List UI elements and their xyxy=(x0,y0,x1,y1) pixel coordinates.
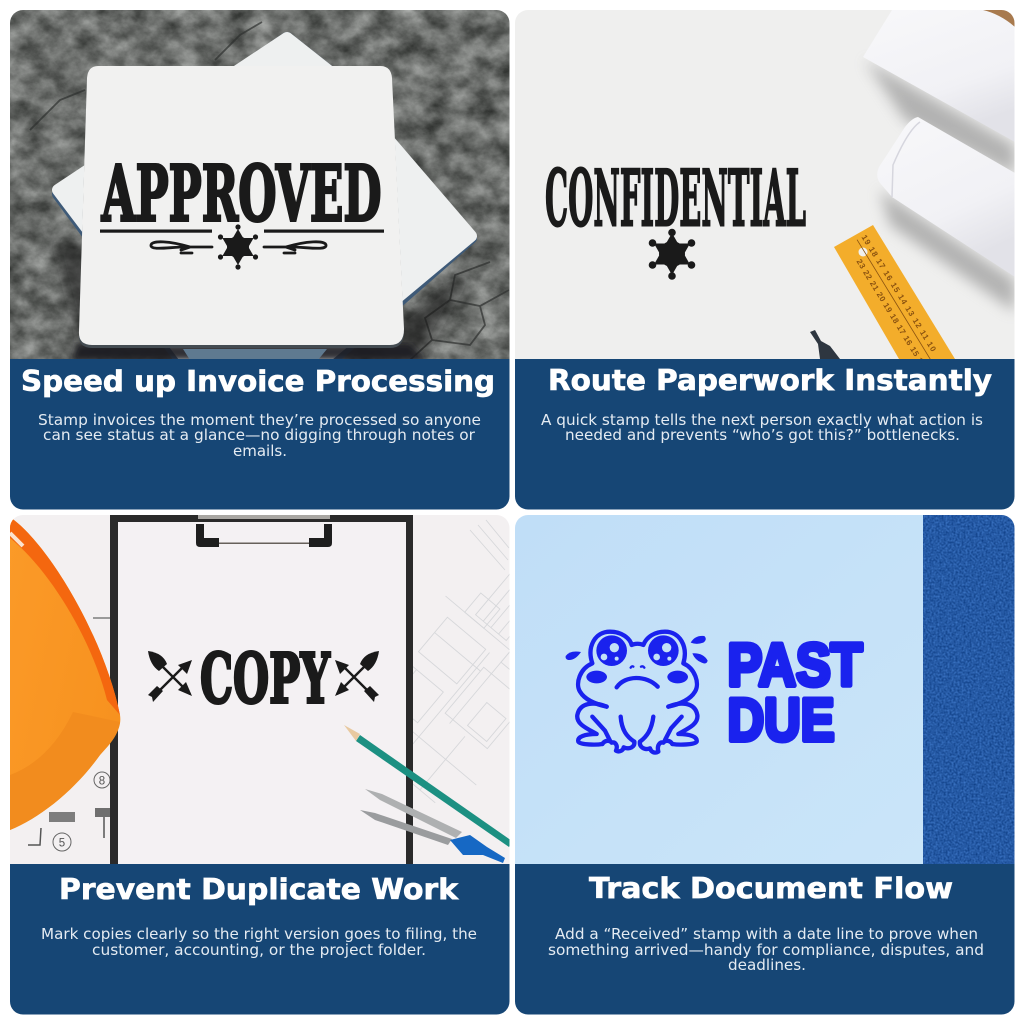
body text xyxy=(548,926,984,974)
stamp: CONFIDENTIAL xyxy=(546,166,806,280)
back coaster edge xyxy=(58,38,471,366)
label 8 xyxy=(94,772,110,788)
footer: track document flow xyxy=(515,864,1015,1015)
photo: clipboard clip xyxy=(196,515,332,547)
stamp: APPROVED xyxy=(100,162,384,270)
photo: blueprint lines right xyxy=(413,520,510,803)
body text: deadlines. xyxy=(728,957,806,974)
photo: white desk background xyxy=(515,10,1015,360)
coaster shadow xyxy=(55,240,470,360)
photo: brown corner object xyxy=(983,10,1015,27)
heading: Track Document Flow xyxy=(589,872,953,905)
photo: compass tip xyxy=(810,330,840,359)
photo: orange hard hat xyxy=(10,517,120,830)
icon: left crossed arrows xyxy=(148,651,192,702)
body text xyxy=(41,926,477,959)
icon: left whip xyxy=(151,242,212,253)
photo: lower roll end seam xyxy=(892,122,920,197)
footer: prevent duplicate work xyxy=(10,864,510,1015)
ruler numbers: 19 18 17 16 15 14 13 12 11 10 xyxy=(860,233,938,354)
heading: Prevent Duplicate Work xyxy=(59,873,459,906)
photo: green pencil xyxy=(344,725,512,847)
photo: concrete cracks xyxy=(30,22,509,360)
label 5 xyxy=(53,833,71,851)
photo: clipboard board xyxy=(110,515,413,865)
front coaster edge xyxy=(79,138,404,348)
photo: lower paper roll xyxy=(877,117,1015,277)
footer: route paperwork instantly xyxy=(515,359,1015,510)
photo: blue fabric xyxy=(923,515,1015,865)
panel: speed up invoice processing xyxy=(10,10,510,510)
footer: speed up invoice processing xyxy=(10,359,510,510)
ruler numbers: 23 22 21 20 19 18 17 16 15 14 xyxy=(854,258,928,369)
panel: prevent duplicate work xyxy=(10,515,510,1014)
stamp: frog PAST DUE xyxy=(566,632,862,754)
body text: customer, accounting, or the project folder. xyxy=(92,942,426,959)
body text: A quick stamp tells the next person exactly what action is xyxy=(541,412,983,429)
body text: emails. xyxy=(233,443,287,460)
photo: yellow ruler xyxy=(834,225,955,359)
rolls shadow xyxy=(865,60,1015,312)
body text: Stamp invoices the moment they’re processed so anyone xyxy=(38,412,481,429)
body text xyxy=(541,412,983,444)
heading: Speed up Invoice Processing xyxy=(21,365,495,398)
heading: Route Paperwork Instantly xyxy=(548,364,992,397)
photo: blueprint marks left xyxy=(28,618,111,851)
body text: Mark copies clearly so the right version goes to filing, the xyxy=(41,926,477,943)
label 5: 5 xyxy=(59,838,65,850)
photo: upper paper roll xyxy=(863,10,1015,142)
icon: right crossed arrows xyxy=(335,651,379,702)
body text: can see status at a glance—no digging through notes or xyxy=(43,427,476,444)
ruler hole xyxy=(858,248,868,256)
panel: track document flow xyxy=(515,515,1015,1015)
photo: drafting compass xyxy=(360,789,505,863)
body text: needed and prevents “who’s got this?” bottlenecks. xyxy=(565,427,960,444)
photo: blueprint background xyxy=(10,515,510,865)
body text: Add a “Received” stamp with a date line to prove when xyxy=(555,926,978,943)
icon: sheriff star xyxy=(218,224,258,270)
front coaster xyxy=(79,66,404,345)
stamp: COPY xyxy=(148,640,379,720)
word: APPROVED: APPROVED xyxy=(101,150,382,240)
icon: sad frog xyxy=(566,632,708,753)
rules xyxy=(100,230,384,233)
word: COPY: COPY xyxy=(200,640,331,720)
icon: right whip xyxy=(264,242,326,253)
word: PAST: PAST xyxy=(728,632,862,698)
body text xyxy=(39,414,480,456)
photo: concrete background xyxy=(10,10,510,360)
back coaster lower edge xyxy=(183,349,327,360)
photo: pale blue paper xyxy=(515,515,925,865)
label 8: 8 xyxy=(99,776,105,788)
word: DUE: DUE xyxy=(728,686,834,754)
dark gap below front coaster xyxy=(72,344,425,360)
icon: sheriff star xyxy=(649,229,695,280)
back coaster xyxy=(58,38,471,358)
photo: clipboard paper xyxy=(118,522,406,865)
panel: route paperwork instantly xyxy=(515,10,1015,510)
body text: something arrived—handy for compliance, disputes, and xyxy=(548,942,984,959)
